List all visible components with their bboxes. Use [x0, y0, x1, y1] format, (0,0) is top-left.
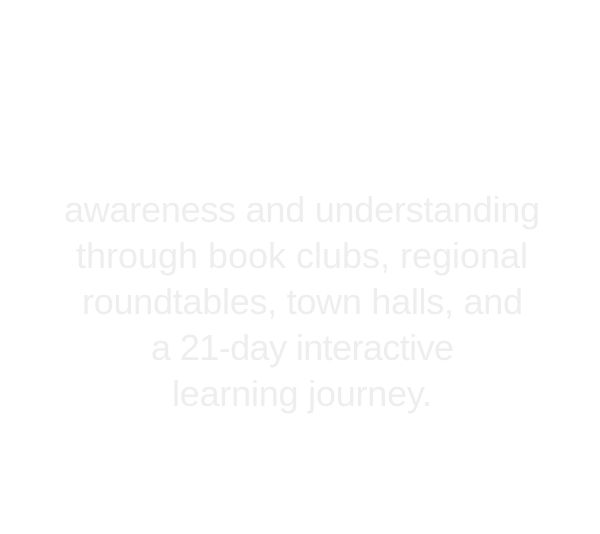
text block: faded description: learning journey.	[172, 373, 432, 414]
text block: faded description	[64, 189, 540, 414]
text block: faded description: a 21-day interactive	[151, 327, 454, 368]
text block: faded description: awareness and understanding	[64, 189, 540, 230]
text block: faded description: through book clubs, regional	[76, 235, 528, 276]
text block: faded description: roundtables, town halls, and	[82, 281, 523, 322]
